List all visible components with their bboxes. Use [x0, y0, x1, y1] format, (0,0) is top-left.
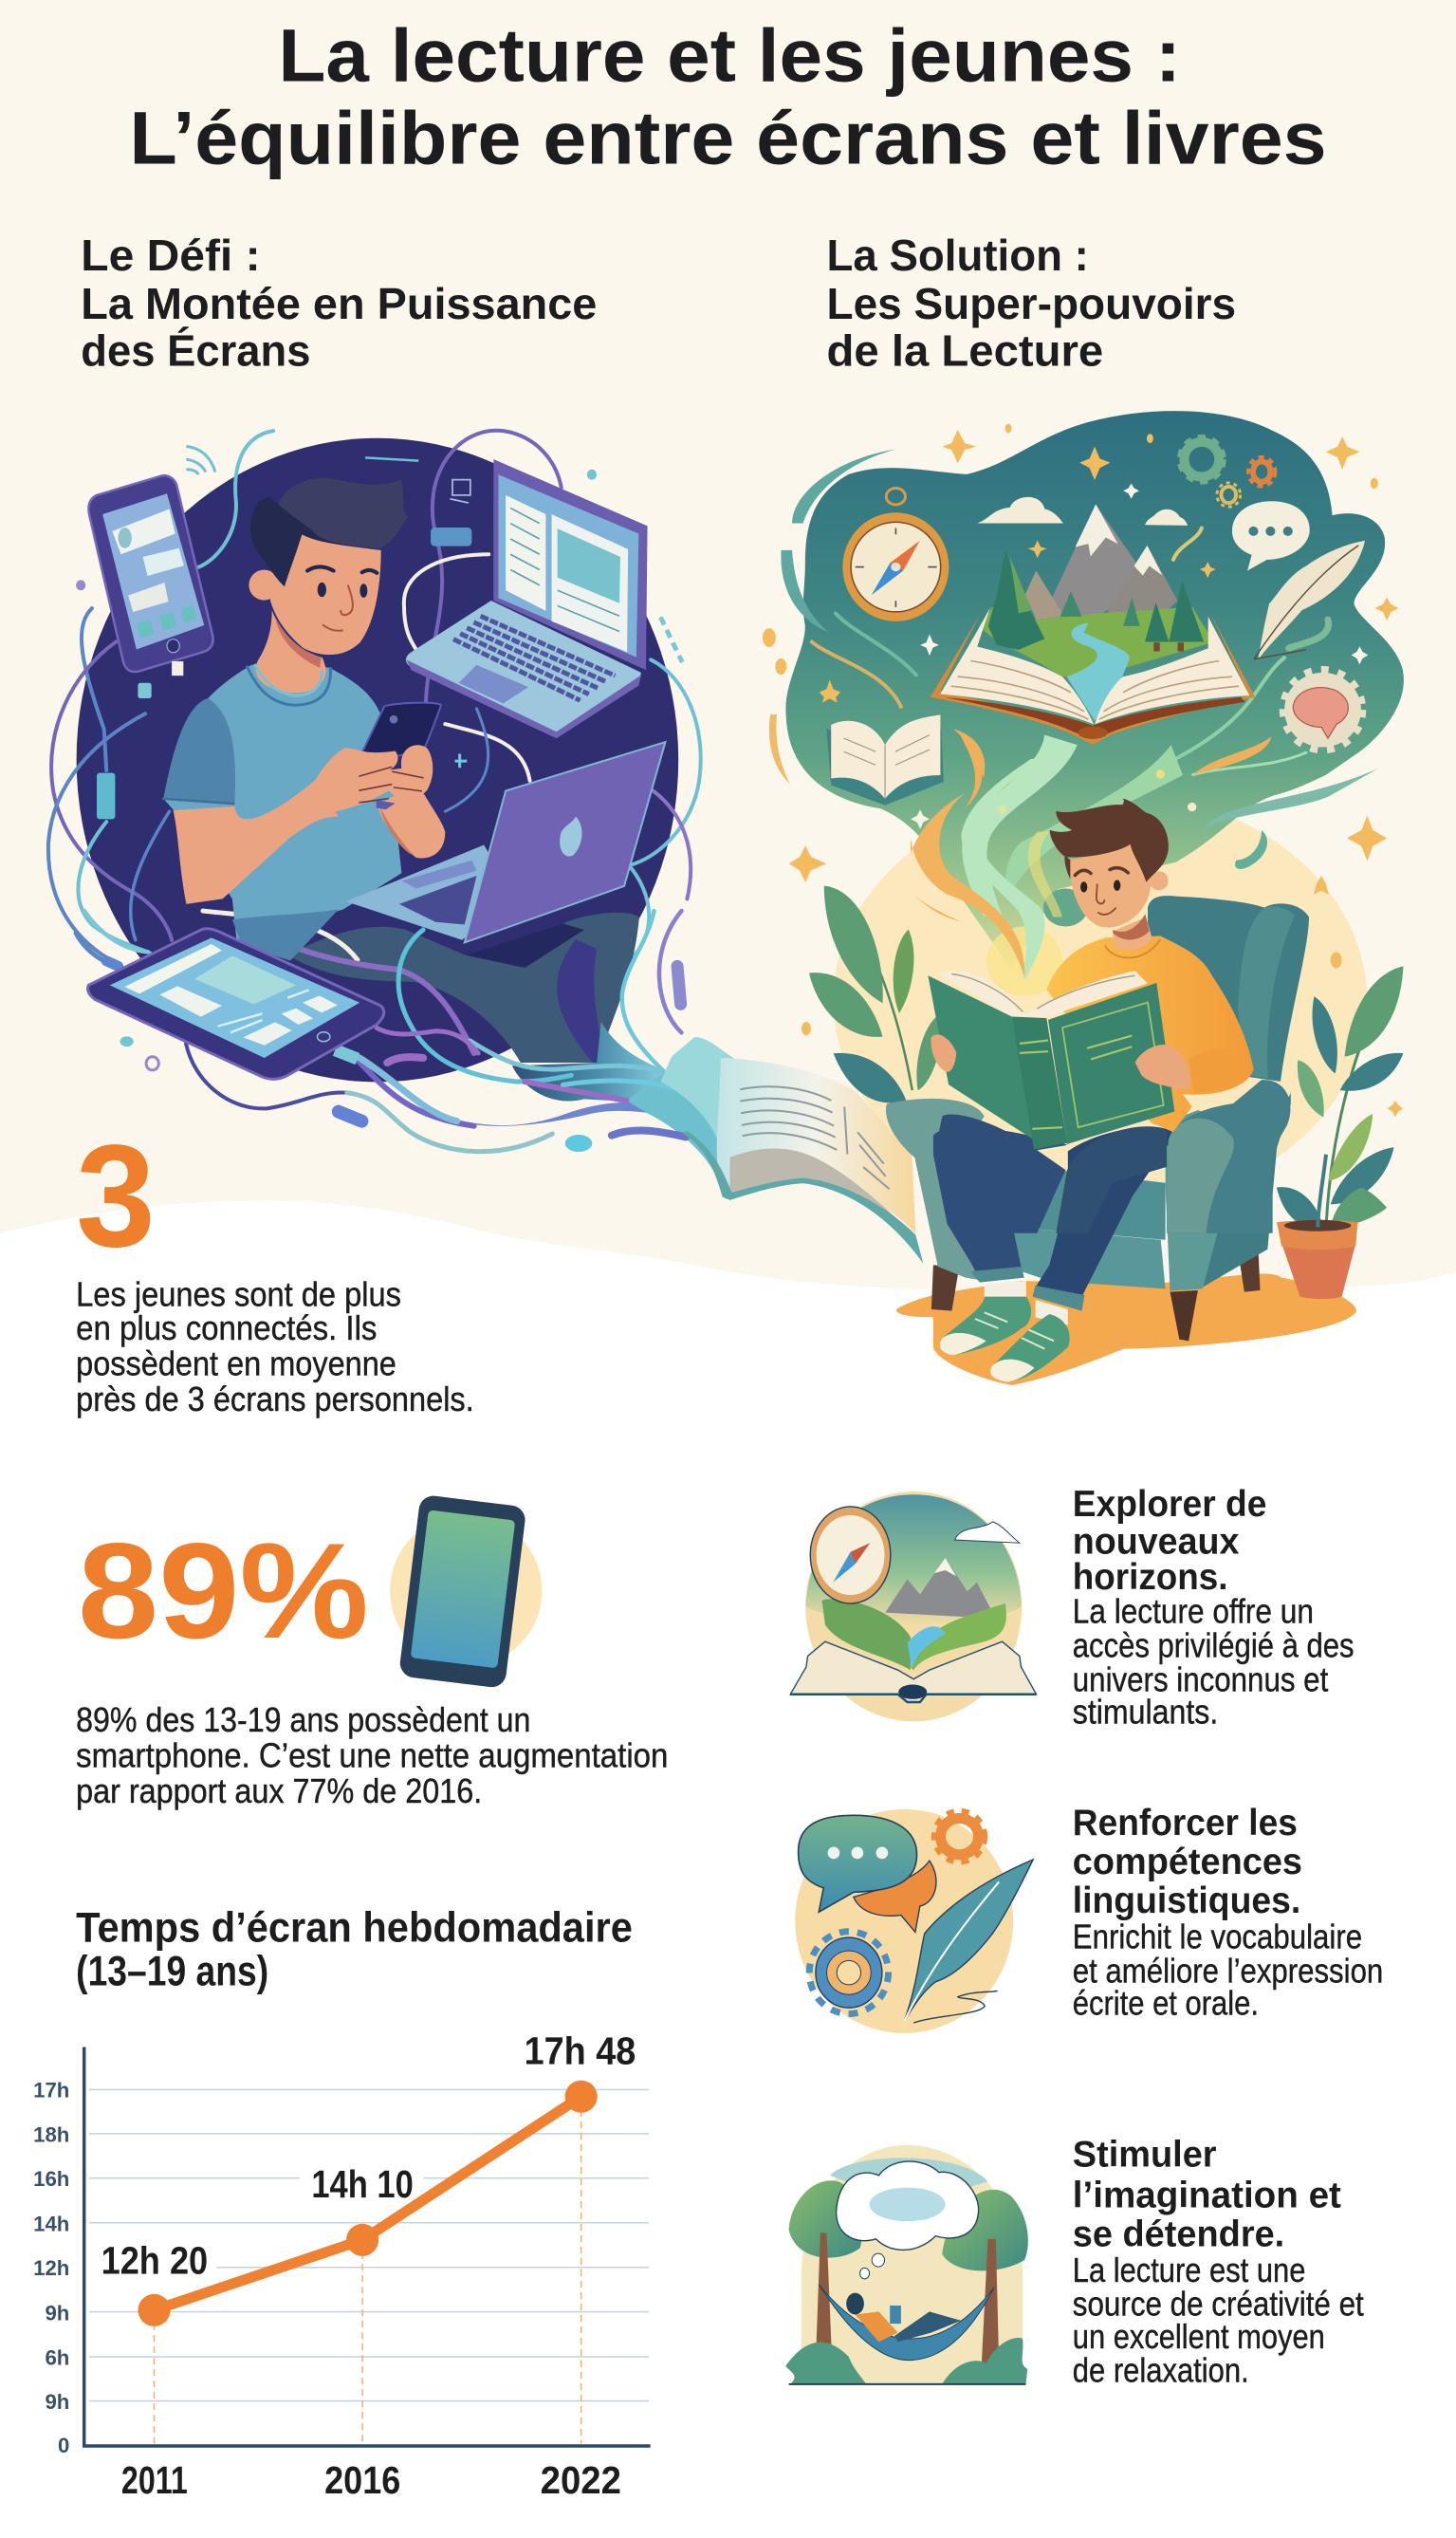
benefit: explorer: univers inconnus et: [1073, 1660, 1328, 1698]
plant: left: [809, 886, 942, 1102]
laptop: floating: [406, 459, 648, 738]
chair right arm: [1167, 1080, 1290, 1233]
armchair lower: [931, 1265, 959, 1311]
y axis labels: 17h: [33, 2078, 69, 2102]
benefit: explorer: Explorer de: [1073, 1483, 1266, 1525]
value labels: 17h 48: [525, 2029, 636, 2073]
stat: 89% smartphone: 89% des 13-19 ans possèdent un: [76, 1701, 530, 1739]
stat: 89% smartphone: par rapport aux 77% de 2016.: [76, 1772, 482, 1810]
stat: 3 screens: près de 3 écrans personnels.: [76, 1380, 474, 1418]
benefit: explorer: horizons.: [1073, 1556, 1228, 1598]
shoes: [940, 1297, 1031, 1355]
benefit: explorer: nouveaux: [1073, 1520, 1240, 1562]
chair back: [1148, 896, 1309, 1082]
y axis labels: 9h: [45, 2301, 69, 2325]
icon: speech bubbles, gears and feather: [795, 1809, 1033, 2033]
warm glow: [833, 789, 1367, 1211]
y axis labels: 16h: [33, 2167, 69, 2191]
backdrop and upper cables: [48, 431, 701, 1082]
floor, pot, armchair base, legs and shoes: [886, 1091, 1357, 1385]
gears: [1180, 437, 1275, 507]
benefit: langue: et améliore l’expression: [1073, 1952, 1383, 1990]
benefit: langue: écrite et orale.: [1073, 1984, 1259, 2022]
benefit: explorer: stimulants.: [1073, 1693, 1218, 1731]
stat: 3 screens: en plus connectés. Ils: [76, 1309, 377, 1347]
y axis labels: 9h: [45, 2390, 69, 2414]
hands: [931, 1034, 956, 1072]
value labels: 14h 10: [311, 2162, 414, 2206]
head: [1150, 871, 1169, 890]
heading: La Solution: de la Lecture: [827, 325, 1103, 375]
neck: [1113, 917, 1152, 950]
book: [939, 971, 1148, 1017]
sparkles: [763, 424, 1403, 1117]
legs: [933, 1127, 1068, 1279]
benefit: langue: compétences: [1073, 1841, 1302, 1882]
illustration: teen surrounded by screens: [48, 431, 740, 1195]
benefit: imagination: source de créativité et: [1073, 2286, 1364, 2324]
value labels: [101, 2029, 636, 2282]
icon: compass, mountains and book: [790, 1491, 1037, 1721]
clouds: [977, 497, 1063, 524]
stat: 89% smartphone: 89%: [78, 1515, 369, 1667]
y axis labels: [33, 2078, 69, 2457]
brain gear: [1284, 673, 1361, 748]
year labels: [121, 2458, 621, 2502]
compass: [842, 489, 949, 621]
speech bubble: [1232, 501, 1310, 571]
benefit: imagination: [785, 2134, 1364, 2390]
stat: 3 screens: Les jeunes sont de plus: [76, 1275, 401, 1313]
chart heading: (13–19 ans): [76, 1949, 268, 1995]
pants and ribbon: [76, 911, 740, 1195]
laptop: front purple: [346, 742, 665, 942]
data points: [138, 2081, 598, 2326]
data line: [155, 2097, 581, 2310]
year labels: 2016: [324, 2458, 400, 2502]
reader: torso, book, head: [928, 799, 1309, 1233]
heading: Le Défi: des Écrans: [81, 325, 310, 375]
y axis labels: 18h: [33, 2122, 69, 2146]
title: L’équilibre entre écrans et livres: [129, 96, 1327, 179]
benefit: langue: linguistiques.: [1073, 1880, 1300, 1921]
heading: Le Défi: Le Défi :: [81, 231, 261, 280]
y axis labels: 6h: [45, 2346, 69, 2370]
benefit: explorer: accès privilégié à des: [1073, 1626, 1355, 1664]
benefit: explorer: [790, 1483, 1355, 1731]
feather: [1259, 541, 1365, 659]
chart heading: [76, 1905, 633, 1995]
pot: [1281, 1243, 1355, 1299]
benefit: imagination: l’imagination et: [1073, 2174, 1341, 2215]
accessories and dots: [76, 446, 682, 1070]
benefit: langue: Enrichit le vocabulaire: [1073, 1917, 1362, 1955]
flying page and ribbon edge: [660, 1037, 923, 1264]
stat: 3 screens: 3: [76, 1114, 156, 1277]
benefit: imagination: se détendre.: [1073, 2213, 1284, 2254]
y axis labels: 0: [58, 2434, 69, 2457]
stat: 89% smartphone: [76, 1494, 668, 1810]
teal imagination cloud: [769, 411, 1404, 969]
benefit: imagination: La lecture est une: [1073, 2251, 1305, 2289]
benefit: langue: [795, 1802, 1383, 2033]
small open book: [826, 714, 944, 806]
heading: La Solution: [827, 231, 1236, 375]
year labels: 2011: [121, 2458, 188, 2502]
axes: [84, 2047, 651, 2446]
benefit: imagination: de relaxation.: [1073, 2352, 1249, 2390]
benefit: imagination: Stimuler: [1073, 2134, 1217, 2176]
heading: Le Défi: [81, 231, 597, 375]
stat: 89% smartphone: smartphone. C’est une nette augmentation: [76, 1736, 668, 1774]
benefit: imagination: un excellent moyen: [1073, 2318, 1325, 2356]
title: [129, 13, 1327, 179]
benefit: langue: Renforcer les: [1073, 1802, 1298, 1843]
y axis labels: 14h: [33, 2212, 69, 2235]
plant: right: [1277, 966, 1403, 1232]
figure: shirt and arm: [162, 665, 445, 960]
y axis labels: 12h: [33, 2256, 69, 2280]
magic stream: [911, 735, 1378, 996]
pop-up book: mountains and trees: [1044, 505, 1145, 617]
value labels: 12h 20: [101, 2238, 208, 2282]
figure: head and hands: [247, 478, 441, 816]
sweater: [1046, 936, 1254, 1132]
line chart: weekly screen time: [33, 2029, 651, 2502]
benefit: explorer: La lecture offre un: [1073, 1593, 1314, 1631]
stat: 3 screens: [76, 1114, 474, 1418]
icon: hammock under trees with thought cloud: [785, 2145, 1028, 2384]
chart heading: Temps d’écran hebdomadaire: [76, 1905, 633, 1952]
pop-up book: cover and pages: [931, 614, 1255, 745]
heading: La Solution: La Solution :: [827, 231, 1089, 280]
heading: Le Défi: La Montée en Puissance: [81, 279, 597, 328]
title: La lecture et les jeunes :: [278, 13, 1181, 97]
illustration: reader with imagination cloud: [660, 411, 1404, 1385]
phone: floating: [88, 475, 213, 676]
stat: 3 screens: possèdent en moyenne: [76, 1345, 396, 1383]
icon: smartphone: [390, 1494, 542, 1689]
dashed drop lines: [155, 2110, 581, 2443]
year labels: 2022: [541, 2458, 621, 2502]
heading: La Solution: Les Super-pouvoirs: [827, 279, 1236, 328]
tablet: [88, 929, 384, 1079]
grid lines: [89, 2089, 649, 2401]
